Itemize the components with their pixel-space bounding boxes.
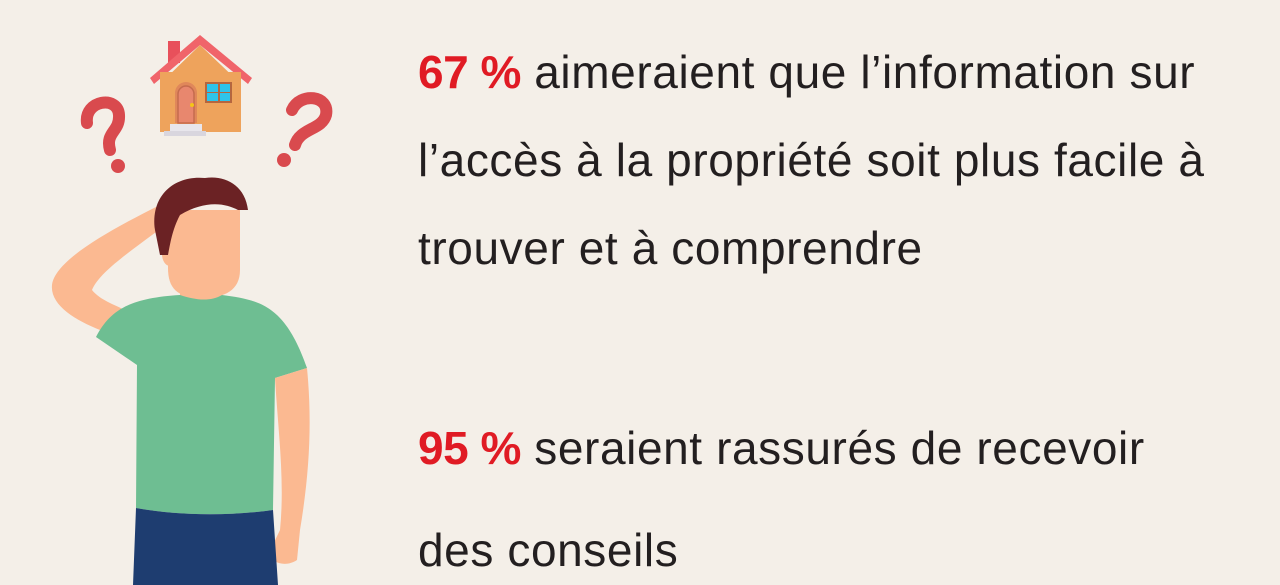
man figure <box>52 177 310 585</box>
text block: statistic 67% <box>418 46 1205 274</box>
icon: left question mark <box>87 103 125 173</box>
text block: statistic 95%: des conseils <box>418 524 678 576</box>
illustration: confused man with house <box>52 35 332 585</box>
text block: statistic 67%: l’accès à la propriété soit plus facile à <box>418 134 1205 186</box>
text block: statistic 67%: trouver et à comprendre <box>418 222 923 274</box>
icon: right question mark <box>277 98 326 167</box>
text block: statistic 67%: 67 % aimeraient que l’information sur <box>418 46 1195 98</box>
text block: statistic 95%: 95 % seraient rassurés de recevoir <box>418 422 1145 474</box>
icon: house <box>150 35 252 136</box>
text block: statistic 95% <box>418 422 1145 576</box>
